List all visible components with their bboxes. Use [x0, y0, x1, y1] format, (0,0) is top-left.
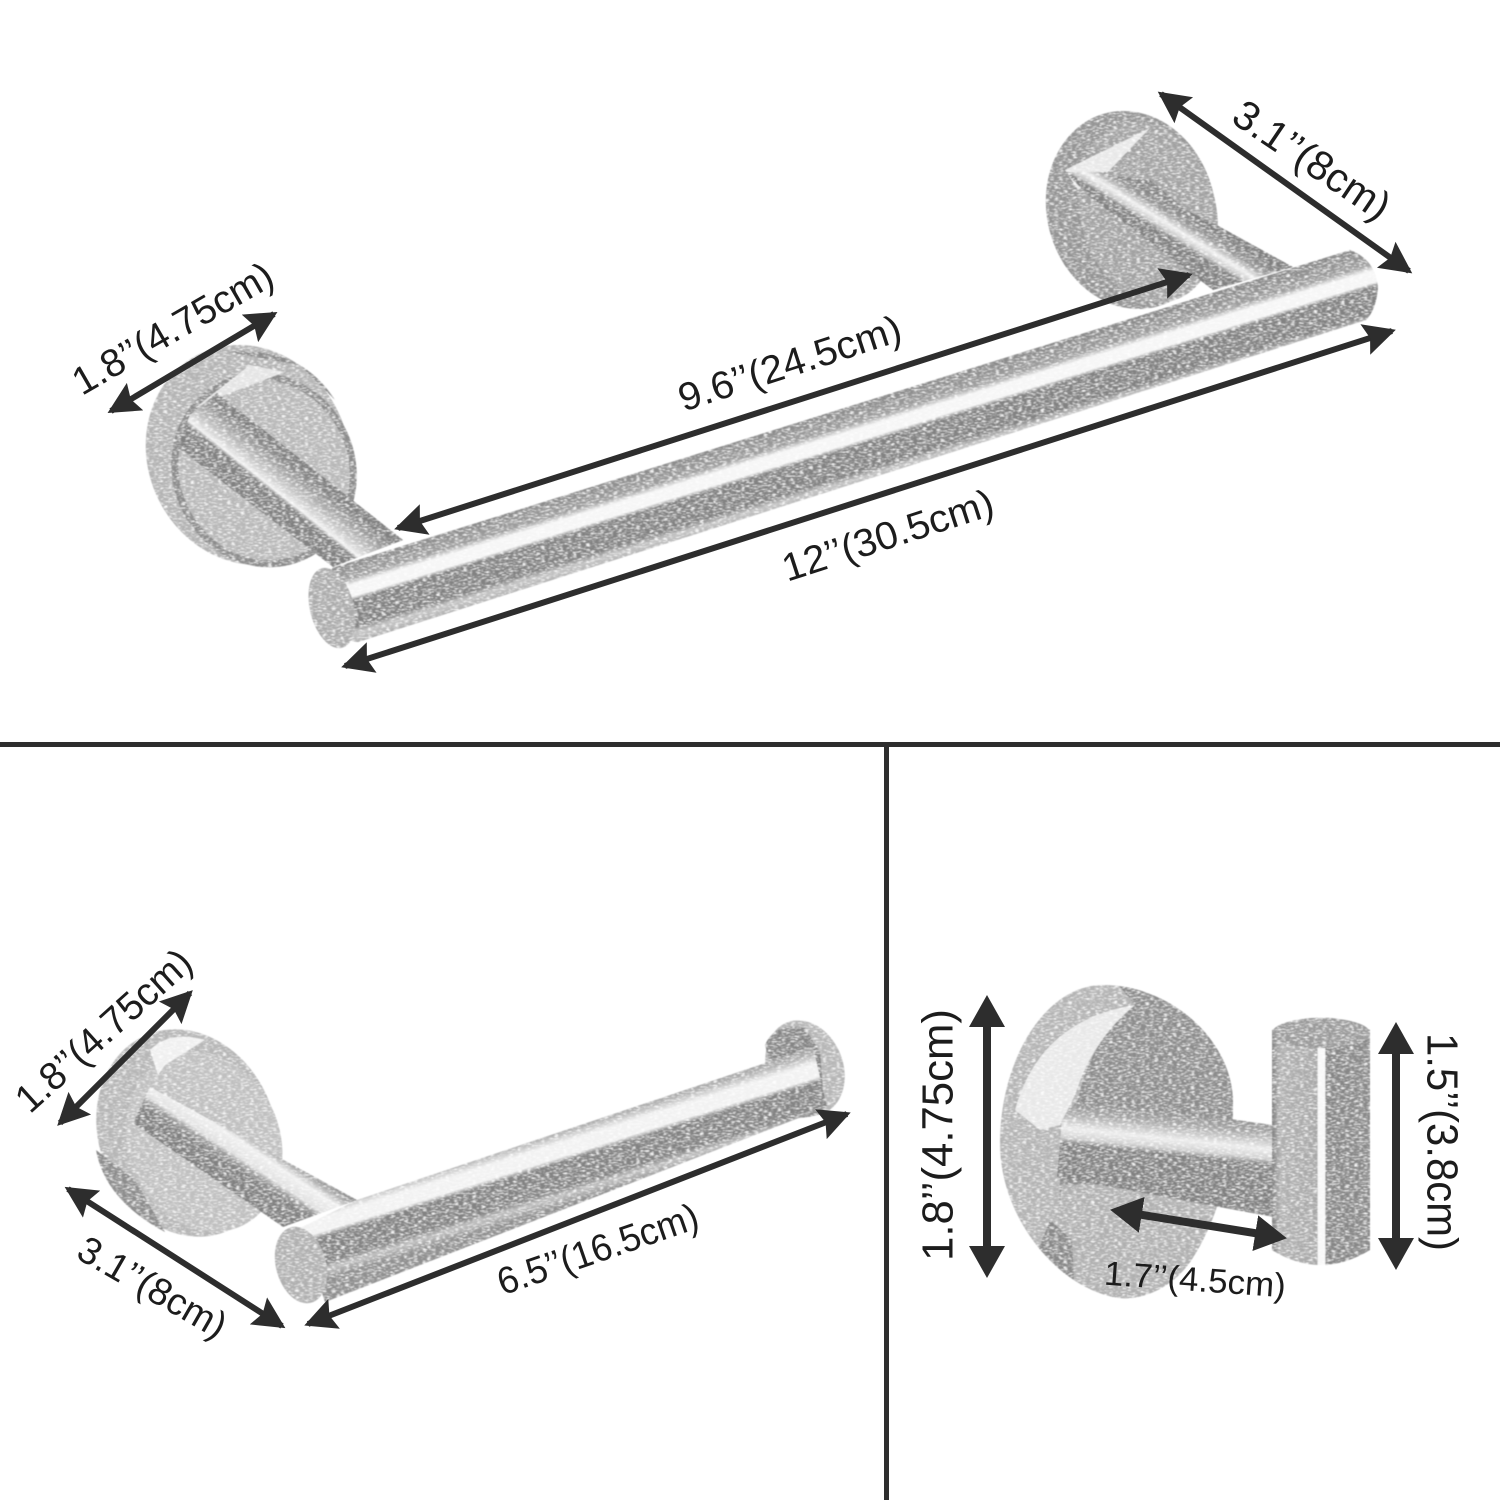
arrow: towel bar disc diameter — [111, 314, 274, 411]
retaining knob — [751, 1008, 859, 1128]
arrow: hook depth — [1118, 1211, 1279, 1237]
wall disc — [1000, 984, 1234, 1299]
arrow: hook height — [1392, 1030, 1400, 1262]
arrow: towel bar depth — [1161, 94, 1409, 271]
main bar — [330, 250, 1378, 642]
towel bar illustration — [110, 92, 1378, 653]
label: paper holder length: 6.5’’(16.5cm) — [492, 1196, 704, 1304]
paper holder bar — [300, 1047, 827, 1302]
mount arm — [133, 1087, 357, 1227]
arrow: paper holder depth — [68, 1189, 282, 1326]
label: towel bar inner length: 9.6’’(24.5cm) — [673, 308, 907, 420]
wall mount disc — [66, 1002, 309, 1264]
arrow: hook disc diameter — [983, 1003, 991, 1270]
arrow: paper holder length — [308, 1114, 847, 1324]
label: towel bar disc: 1.8’’(4.75cm) — [65, 254, 281, 404]
bar end cap — [301, 563, 363, 653]
bar end cap — [267, 1221, 335, 1309]
hook cylinder — [1272, 1018, 1370, 1265]
label: hook height: 1.5’’(3.8cm) — [1418, 1033, 1466, 1251]
arrow: towel bar total length — [345, 331, 1392, 666]
left mount arm — [177, 393, 403, 567]
right mount arm — [1065, 172, 1293, 290]
panel divider: vertical — [884, 744, 889, 1500]
left wall mount disc — [110, 311, 386, 599]
label: paper holder disc: 1.8’’(4.75cm) — [7, 941, 201, 1121]
toilet paper holder illustration — [66, 1002, 859, 1309]
label: hook disc: 1.8’’(4.75cm) — [914, 1009, 962, 1261]
label: hook depth: 1.7’’(4.5cm) — [1103, 1255, 1287, 1305]
hook arm — [1057, 1097, 1290, 1220]
arrow: paper holder disc diameter — [60, 993, 190, 1123]
panel divider: horizontal — [0, 742, 1500, 747]
label: paper holder depth: 3.1’’(8cm) — [70, 1229, 234, 1347]
label: towel bar total length: 12’’(30.5cm) — [777, 482, 999, 590]
robe hook illustration — [1000, 984, 1371, 1299]
arrow: towel bar inner length — [398, 275, 1189, 528]
right wall mount disc — [1024, 92, 1238, 328]
label: towel bar depth: 3.1’’(8cm) — [1225, 91, 1399, 229]
